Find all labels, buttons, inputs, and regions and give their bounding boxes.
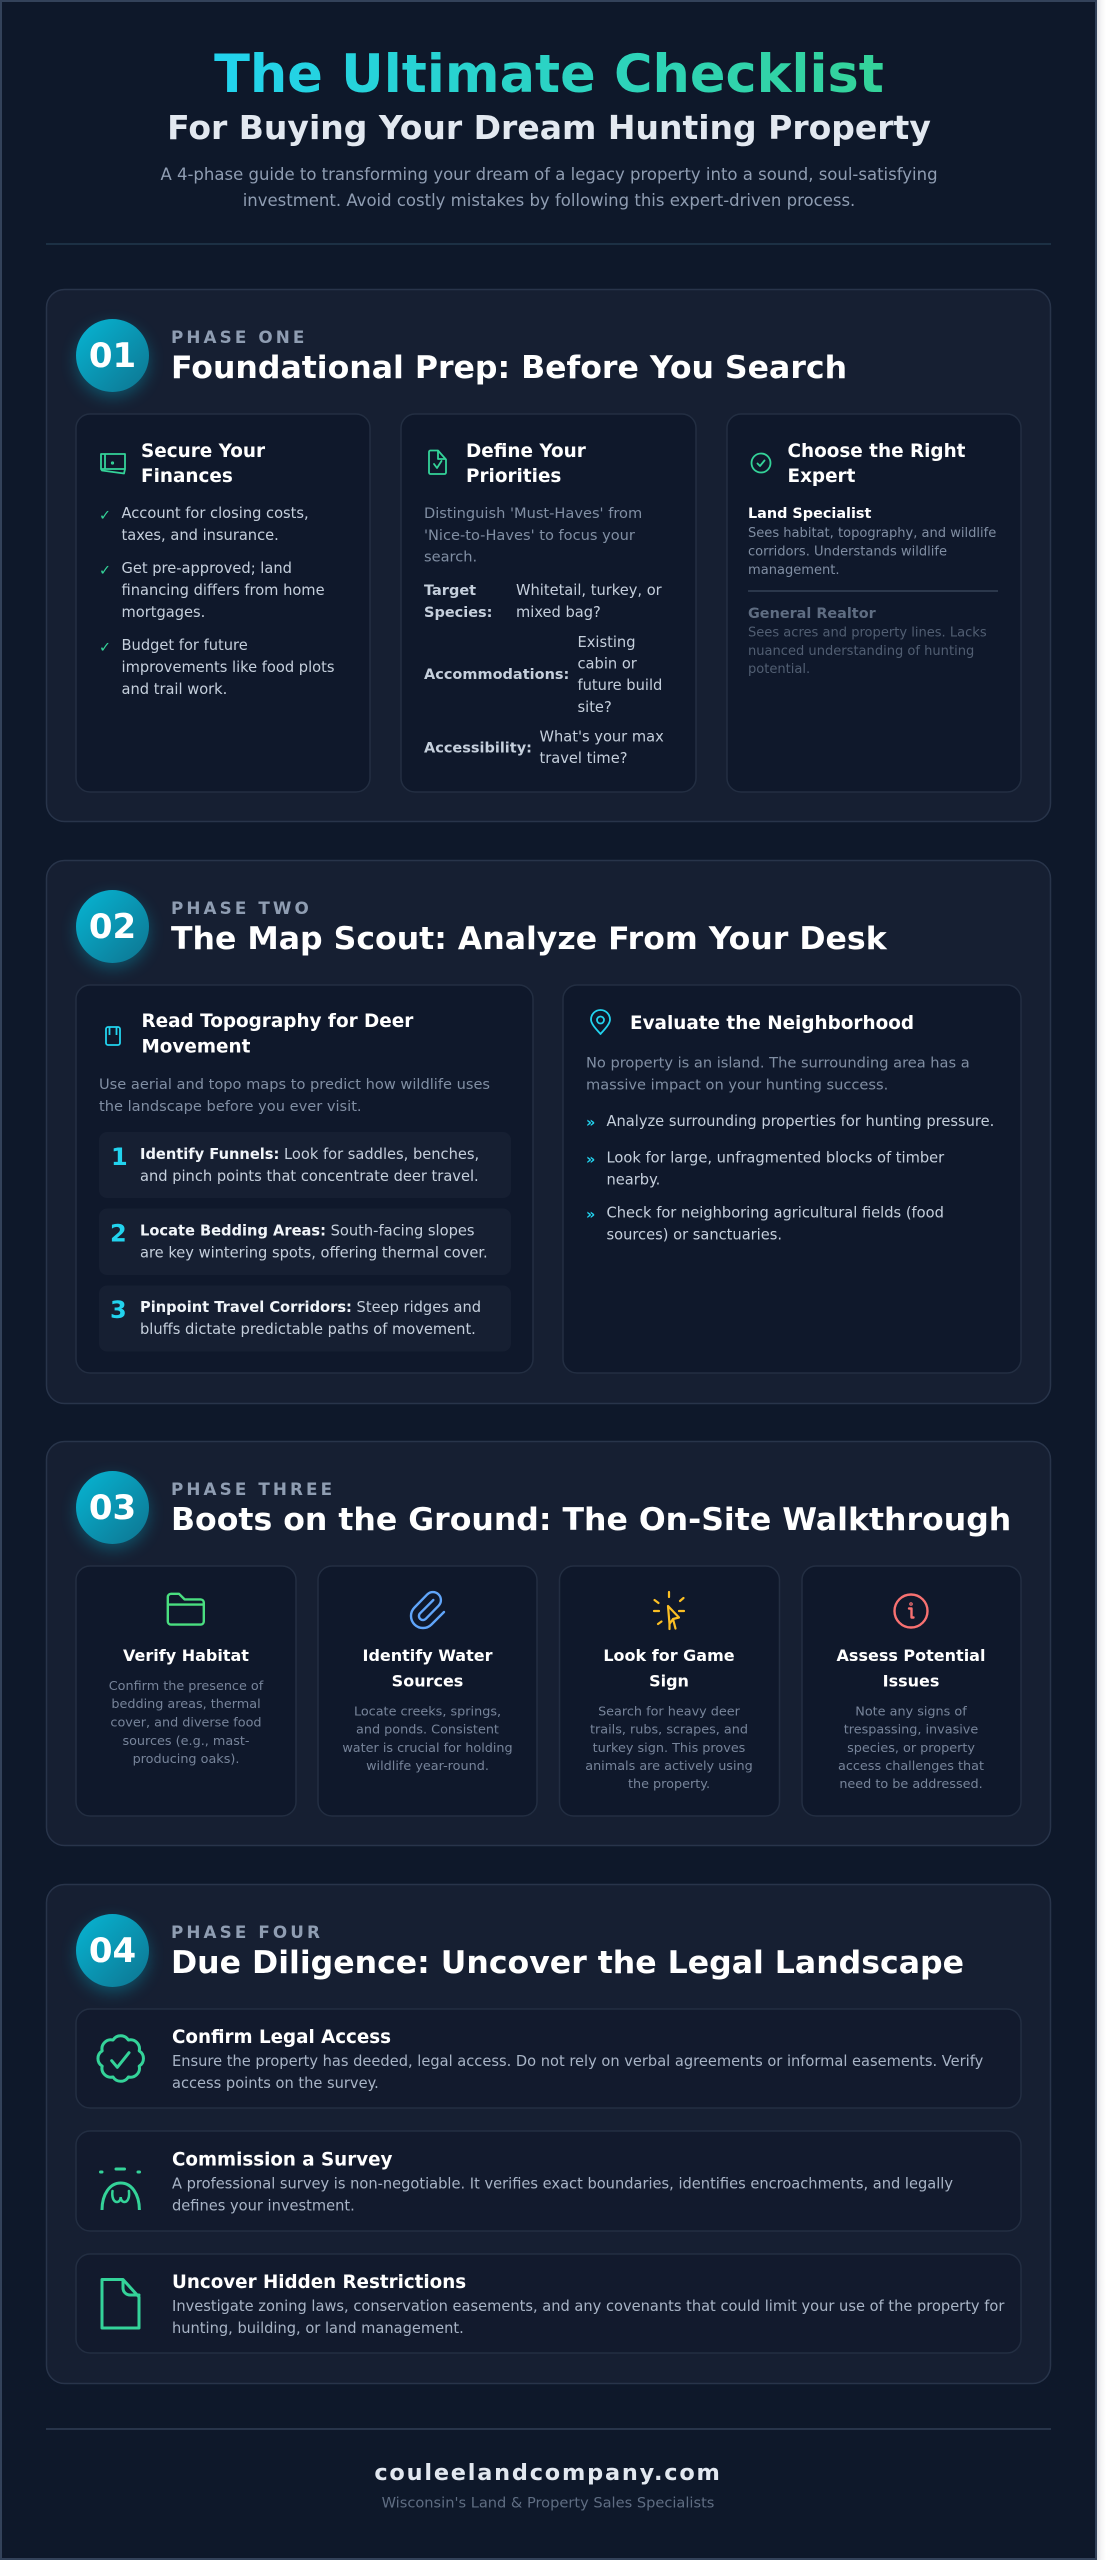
- card: evaluate the neighborhood: [563, 985, 1021, 1373]
- land specialist: management.: [748, 563, 840, 578]
- card text: the property.: [628, 1777, 710, 1792]
- card description: search.: [424, 548, 477, 566]
- priority rows: Whitetail, turkey, or: [516, 582, 662, 599]
- phase heading: Boots on the Ground: The On-Site Walkthrough: [171, 1502, 1011, 1538]
- card text: trespassing, invasive: [844, 1722, 978, 1738]
- priority rows: mixed bag?: [516, 604, 601, 621]
- land specialist: [748, 506, 996, 578]
- card: commission a survey: defines your investment.: [172, 2198, 355, 2214]
- card text: need to be addressed.: [839, 1777, 983, 1792]
- card title: Issues: [883, 1672, 939, 1690]
- land specialist: Land Specialist: [748, 506, 871, 522]
- checklist: ✓: [99, 508, 111, 524]
- step 3: 3: [110, 1296, 127, 1324]
- card description: the landscape before you ever visit.: [99, 1098, 362, 1115]
- card title: Look for Game: [603, 1646, 735, 1665]
- bullet list: [586, 1113, 994, 1244]
- checklist: [99, 505, 334, 698]
- card title: Priorities: [466, 466, 561, 487]
- priority rows: cabin or: [578, 656, 638, 672]
- card text: Uncover Hidden Restrictions: [172, 2272, 466, 2293]
- card title: Assess Potential: [837, 1646, 985, 1665]
- checklist: ✓: [99, 563, 111, 579]
- icon: document: [102, 2280, 139, 2328]
- step 3: [99, 1286, 511, 1352]
- card title: Choose the Right: [788, 441, 965, 462]
- phase number badge: [76, 319, 149, 397]
- card: commission a survey: [76, 2131, 1021, 2231]
- card title: Movement: [142, 1036, 251, 1058]
- general realtor: General Realtor: [748, 606, 877, 622]
- card description: massive impact on your hunting success.: [586, 1076, 888, 1094]
- footer: [374, 2460, 722, 2512]
- priority rows: Species:: [424, 605, 492, 621]
- panel: phase one: [46, 290, 1050, 822]
- card: uncover hidden restrictions: hunting, building, or land management.: [172, 2320, 464, 2337]
- bullet list: »: [586, 1115, 595, 1131]
- card text: Search for heavy deer: [598, 1704, 740, 1720]
- card text: access challenges that: [838, 1759, 984, 1774]
- priority rows: travel time?: [540, 750, 627, 767]
- bullet list: »: [586, 1207, 595, 1223]
- general realtor: [748, 606, 987, 677]
- checklist: Account for closing costs,: [122, 505, 309, 522]
- card title: Read Topography for Deer: [142, 1011, 413, 1032]
- subtitle: For Buying Your Dream Hunting Property: [167, 108, 931, 147]
- step 2: are key wintering spots, offering thermal cover.: [140, 1244, 488, 1262]
- step 2: [99, 1208, 511, 1275]
- priority rows: Accommodations:: [424, 667, 569, 683]
- card description: Use aerial and topo maps to predict how wildlife uses: [99, 1076, 490, 1093]
- phase number badge: [76, 1471, 149, 1549]
- card title: Expert: [788, 466, 856, 487]
- website: couleelandcompany.com: [374, 2460, 722, 2486]
- bullet list: Check for neighboring agricultural fields (food: [606, 1204, 944, 1222]
- icon: map book: [106, 1027, 120, 1045]
- card text: wildlife year-round.: [366, 1759, 489, 1774]
- card: confirm legal access: Ensure the property has deeded, legal access. Do not rely on verbal agreements or informal easements. Verify: [172, 2053, 983, 2070]
- step 3: bluffs dictate predictable paths of movement.: [140, 1321, 476, 1338]
- priority rows: Target: [424, 583, 476, 599]
- card text: bedding areas, thermal: [111, 1697, 261, 1712]
- checklist: ✓: [99, 640, 111, 656]
- icon: cursor click: [654, 1592, 684, 1629]
- intro text: investment. Avoid costly mistakes by following this expert-driven process.: [243, 191, 855, 210]
- card: assess potential issues: [802, 1566, 1021, 1816]
- icon: survey signal: [100, 2169, 140, 2210]
- intro text: A 4-phase guide to transforming your dream of a legacy property into a sound, soul-satisfying: [160, 165, 938, 184]
- priority rows: future build: [578, 677, 662, 694]
- bullet list: Look for large, unfragmented blocks of timber: [606, 1150, 944, 1166]
- general realtor: nuanced understanding of hunting: [748, 644, 974, 659]
- bullet list: sources) or sanctuaries.: [606, 1226, 782, 1244]
- checklist: Budget for future: [122, 637, 248, 654]
- card text: cover, and diverse food: [110, 1716, 262, 1730]
- card text: trails, rubs, scrapes, and: [590, 1722, 748, 1738]
- tagline: Wisconsin's Land & Property Sales Specialists: [382, 2494, 714, 2512]
- card: define your priorities: [401, 414, 696, 792]
- priority rows: Accessibility:: [424, 740, 532, 756]
- icon: document check: [429, 450, 446, 474]
- phase label: PHASE THREE: [171, 1479, 335, 1499]
- card: commission a survey: A professional survey is non-negotiable. It verifies exact boundaries, identifies encroachments, and legally: [172, 2176, 953, 2192]
- card: read topography: [76, 985, 533, 1373]
- step 1: [99, 1132, 511, 1198]
- card title: Verify Habitat: [123, 1646, 249, 1665]
- phase heading: The Map Scout: Analyze From Your Desk: [171, 921, 888, 957]
- step 2: 2: [110, 1220, 127, 1248]
- land specialist: Sees habitat, topography, and wildlife: [748, 526, 996, 541]
- panel: phase two: [46, 860, 1050, 1404]
- card title: Identify Water: [362, 1646, 493, 1665]
- step 1: and pinch points that concentrate deer travel.: [140, 1168, 479, 1185]
- phase heading: Foundational Prep: Before You Search: [171, 350, 847, 386]
- card text: Commission a Survey: [172, 2150, 393, 2170]
- step 3: Pinpoint Travel Corridors: Steep ridges and: [140, 1299, 481, 1316]
- general realtor: Sees acres and property lines. Lacks: [748, 626, 987, 640]
- card text: Note any signs of: [855, 1704, 967, 1720]
- general realtor: potential.: [748, 662, 810, 677]
- priority rows: What's your max: [540, 728, 664, 746]
- card: uncover hidden restrictions: [76, 2254, 1021, 2353]
- phase number badge: 04: [89, 1931, 136, 1971]
- step 1: Identify Funnels: Look for saddles, benches,: [140, 1146, 479, 1163]
- card text: Confirm Legal Access: [172, 2027, 391, 2048]
- card description: Distinguish 'Must-Haves' from: [424, 505, 642, 522]
- icon: check circle: [752, 454, 770, 472]
- header: [160, 44, 938, 210]
- checklist: taxes, and insurance.: [122, 527, 279, 544]
- phase number badge: 01: [89, 336, 136, 376]
- phase label: PHASE FOUR: [171, 1922, 323, 1942]
- card: confirm legal access: access points on the survey.: [172, 2075, 379, 2092]
- card title: Sign: [649, 1672, 689, 1690]
- panel: phase three: [46, 1442, 1050, 1846]
- icon: map pin: [591, 1010, 610, 1034]
- card: uncover hidden restrictions: Investigate zoning laws, conservation easements, and any covenants that could limit your use of the property for: [172, 2298, 1004, 2315]
- checklist: Get pre-approved; land: [122, 560, 292, 577]
- phase number badge: 02: [89, 907, 136, 947]
- checklist: financing differs from home: [122, 582, 325, 599]
- priority rows: Existing: [578, 634, 636, 651]
- step 1: 1: [111, 1143, 128, 1171]
- card text: producing oaks).: [133, 1752, 239, 1767]
- icon: folder: [168, 1594, 205, 1625]
- step 2: Locate Bedding Areas: South-facing slopes: [140, 1222, 475, 1240]
- card text: animals are actively using: [585, 1759, 753, 1774]
- bullet list: »: [586, 1152, 595, 1168]
- card text: Confirm the presence of: [109, 1679, 263, 1694]
- card title: Define Your: [466, 441, 586, 462]
- card: confirm legal access: [76, 2009, 1021, 2108]
- checklist: improvements like food plots: [122, 659, 334, 676]
- icon: badge check: [98, 2036, 143, 2081]
- priority rows: site?: [578, 699, 612, 716]
- phase label: PHASE TWO: [171, 898, 312, 918]
- phase label: PHASE ONE: [171, 327, 307, 347]
- priority rows: [424, 582, 664, 767]
- card description: 'Nice-to-Haves' to focus your: [424, 527, 635, 544]
- checklist: mortgages.: [122, 604, 205, 621]
- bullet list: nearby.: [606, 1172, 660, 1188]
- title: The Ultimate Checklist: [214, 44, 884, 105]
- card title: Sources: [392, 1672, 463, 1690]
- icon: info circle: [894, 1594, 928, 1628]
- bullet list: Analyze surrounding properties for hunting pressure.: [606, 1113, 994, 1130]
- card text: turkey sign. This proves: [593, 1741, 746, 1756]
- phase number badge: [76, 1914, 149, 1992]
- panel: phase four: [46, 1884, 1050, 2384]
- card: look for game sign: [560, 1566, 780, 1816]
- phase heading: Due Diligence: Uncover the Legal Landscape: [171, 1945, 964, 1981]
- card text: species, or property: [847, 1741, 975, 1756]
- card text: water is crucial for holding: [342, 1741, 513, 1756]
- land specialist: corridors. Understands wildlife: [748, 544, 947, 560]
- card: choose the right expert: [727, 414, 1021, 792]
- card: identify water sources: [318, 1566, 537, 1816]
- card: verify habitat: [76, 1566, 296, 1816]
- card text: and ponds. Consistent: [356, 1722, 499, 1738]
- icon: paperclip: [411, 1592, 444, 1628]
- card title: Evaluate the Neighborhood: [630, 1013, 914, 1034]
- card text: Locate creeks, springs,: [354, 1704, 501, 1720]
- card title: Secure Your: [141, 441, 265, 462]
- card text: sources (e.g., mast-: [122, 1734, 250, 1749]
- card description: No property is an island. The surrounding area has a: [586, 1054, 970, 1072]
- phase number badge: 03: [89, 1488, 136, 1528]
- icon: cash stack: [101, 454, 125, 474]
- card: secure your finances: [76, 414, 370, 792]
- phase number badge: [76, 890, 149, 968]
- checklist: and trail work.: [122, 681, 227, 698]
- card title: Finances: [141, 466, 233, 487]
